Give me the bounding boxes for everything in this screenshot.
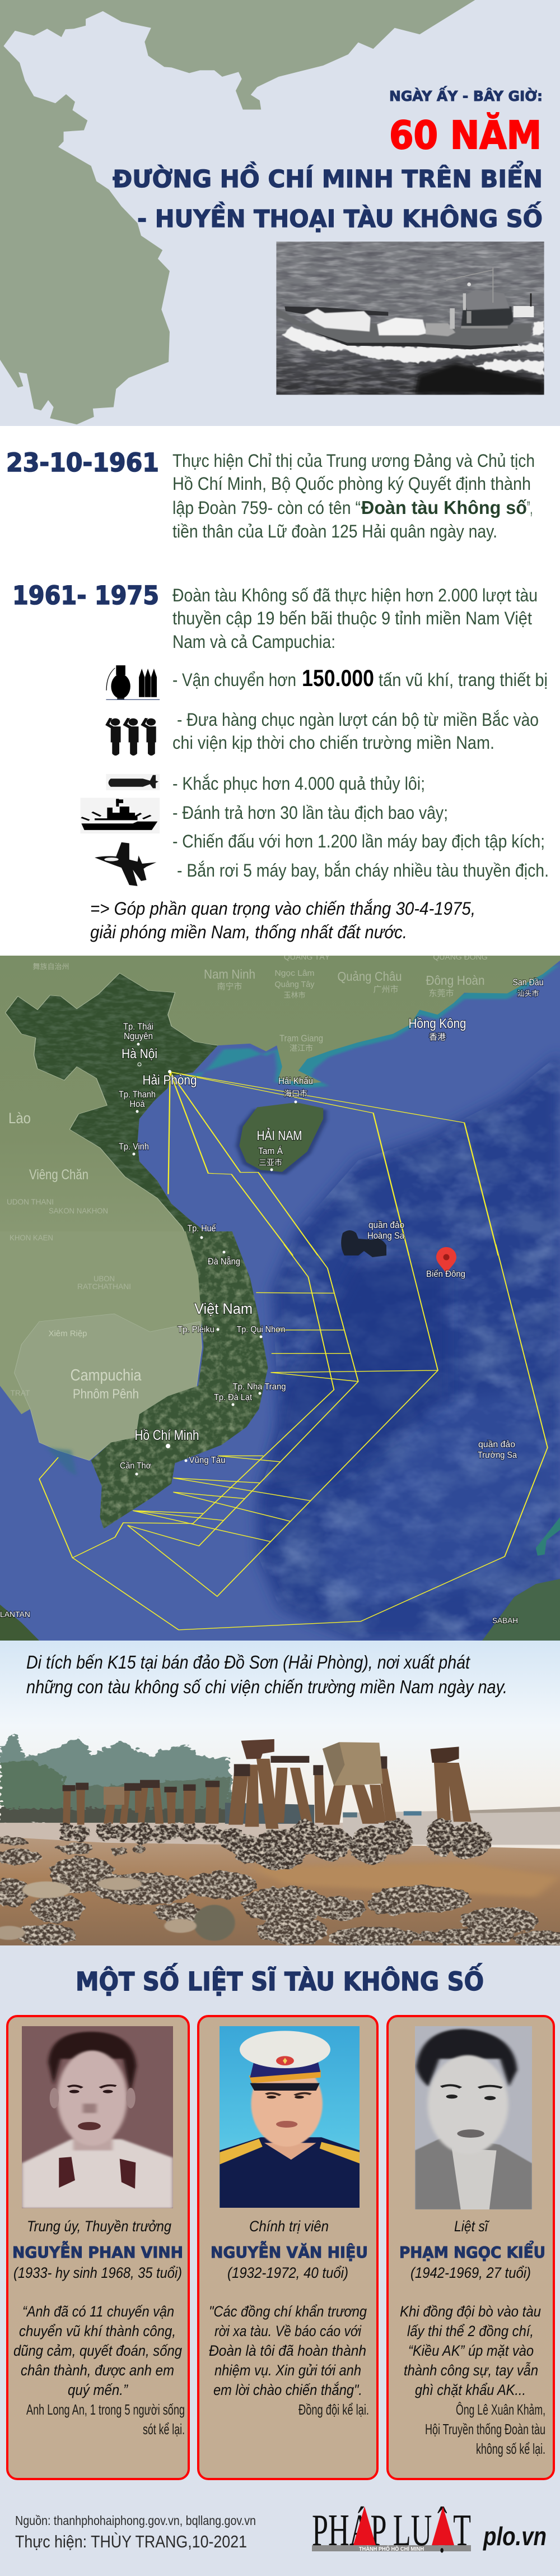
map labels: Tp. Nha Trang [233, 1382, 286, 1392]
map labels: Hồng Kông [409, 1016, 466, 1031]
concrete block [323, 1742, 383, 1786]
text block: founding: Đoàn tàu Không số [361, 497, 527, 518]
card: Nguyễn Phan Vinh [7, 2016, 189, 2479]
icon: saluting soldiers [105, 718, 156, 756]
logo: plo.vn: plo.vn [482, 2522, 547, 2551]
map labels: Nguyên [124, 1031, 153, 1041]
role and name: PHẠM NGỌC KIỂU [399, 2240, 545, 2262]
quote: thành công sự, tay vẫn [404, 2362, 538, 2379]
portrait 1 [21, 2026, 173, 2208]
map labels: Nam Ninh [204, 967, 255, 981]
map labels: Vũng Tàu [189, 1456, 225, 1465]
quote: quý mến.” [68, 2382, 128, 2398]
quote: sót kể lại. [143, 2421, 185, 2438]
source credits: Nguồn: thanhphohaiphong.gov.vn, bqllang.gov.vn [15, 2513, 256, 2528]
conclusion [90, 898, 475, 942]
role and name: Trung úy, Thuyền trưởng [27, 2218, 171, 2235]
logo: Pháp Luật [312, 2506, 471, 2555]
map labels: UBON [94, 1274, 115, 1283]
map labels: quần đảo [368, 1220, 404, 1230]
map labels: Trường Sa [478, 1451, 517, 1460]
photo: boat at sea [276, 242, 544, 395]
map labels: Việt Nam [194, 1300, 253, 1317]
map labels: 香港 [429, 1032, 446, 1042]
role and name: NGUYỄN PHAN VINH [12, 2240, 183, 2262]
conclusion: => Góp phần quan trọng vào chiến thắng 30-4-1975, [90, 898, 475, 919]
map labels: Ngọc Lâm [274, 969, 315, 978]
title line 2: - HUYỀN THOẠI TÀU KHÔNG SỐ [137, 201, 543, 233]
map labels: Tp. Vinh [119, 1141, 149, 1152]
barnacle bases [59, 1818, 491, 1871]
text block: founding: ”, [527, 498, 533, 518]
quote: chân thành, được anh em [21, 2362, 174, 2379]
title line 1: ĐƯỜNG HỒ CHÍ MINH TRÊN BIỂN [113, 161, 543, 193]
quote [209, 2303, 369, 2418]
text block: achievements intro: thuyền cập 19 bến bãi thuộc 9 tỉnh miền Nam Việt [172, 608, 532, 628]
role and name [211, 2218, 368, 2281]
map labels: 东莞市 [428, 989, 454, 998]
map labels: UDON THANI [7, 1197, 54, 1206]
card: Nguyễn Văn Hiệu [198, 2016, 377, 2479]
map labels: QUẢNG ĐÔNG [433, 952, 488, 961]
role and name: (1933- hy sinh 1968, 35 tuổi) [13, 2264, 182, 2281]
quote: lấy thi thể 2 đồng chí, [407, 2323, 534, 2339]
icon: fighter jet [95, 842, 156, 886]
wake [282, 321, 544, 374]
map: sea routes [0, 952, 560, 1641]
map labels: HẢI NAM [256, 1127, 302, 1143]
map labels: Tp. Huế [187, 1223, 216, 1234]
map labels: Tp. Thanh [119, 1089, 156, 1100]
foreground rocks [0, 1837, 560, 1947]
quote: em lời chào chiến thắng". [213, 2381, 362, 2398]
source credits: Thực hiện: THÙY TRANG,10-2021 [15, 2532, 247, 2551]
map labels: Đông Hoàn [426, 973, 485, 988]
portrait 3 [415, 2026, 532, 2209]
quote: ghì chặt khẩu AK... [415, 2382, 526, 2398]
map silhouette of Vietnam and neighbours [0, 0, 475, 424]
kicker: NGÀY ẤY - BÂY GIỜ: [389, 86, 543, 104]
map labels: Tp. Thái [123, 1021, 153, 1032]
map labels: Tp. Pleiku [178, 1325, 214, 1335]
route lines north [168, 1072, 498, 1255]
map labels [0, 952, 543, 1625]
trees [0, 1735, 236, 1824]
map labels: 南宁市 [217, 982, 242, 992]
text block: bullet list: chi viện kịp thời cho chiến trường miền Nam. [172, 733, 494, 753]
deep sea [252, 1054, 560, 1641]
hull [276, 308, 532, 348]
route lines south [39, 1244, 548, 1630]
quote [13, 2303, 185, 2438]
quote: Đồng đội kể lại. [298, 2401, 369, 2418]
map labels: 舞族自治州 [32, 962, 69, 971]
map labels: Hoá [130, 1099, 145, 1109]
card: Phạm Ngọc Kiểu [388, 2016, 554, 2479]
island blob: Hoàng Sa [341, 1230, 386, 1257]
land: Cambodia and south Vietnam [0, 1231, 560, 1641]
text block: bullet list [172, 665, 549, 881]
map labels: 玉林市 [283, 991, 306, 999]
map labels: Xiêm Riệp [48, 1329, 87, 1338]
text block: bullet list: - Đánh trả hơn 30 lần tàu địch bao vây; [172, 803, 448, 823]
map labels: Trạm Giang [279, 1033, 323, 1044]
map labels: 三亚市 [259, 1158, 282, 1167]
role and name: Liệt sĩ [454, 2218, 489, 2235]
section heading: MỘT SỐ LIỆT SĨ TÀU KHÔNG SỐ [76, 1964, 484, 1996]
cargo [304, 290, 514, 336]
tidal flat [0, 1823, 560, 1845]
panel: header [0, 0, 560, 426]
map labels: SAKON NAKHON [49, 1206, 108, 1215]
map labels: Lào [8, 1110, 31, 1127]
map labels: Hà Nội [122, 1046, 157, 1062]
icon: grenade and bullets [106, 665, 160, 699]
map labels: San Đầu [513, 977, 543, 988]
caption: Di tích bến K15 tại bán đảo Đồ Sơn (Hải Phòng), nơi xuất phát [26, 1652, 471, 1672]
map labels: Biển Đông [426, 1269, 465, 1279]
quote: “Anh đã có 11 chuyến vận [22, 2303, 174, 2320]
quote: chuyển vũ khí thành công, [19, 2323, 176, 2339]
map labels: 海口市 [284, 1089, 307, 1098]
logo: Pháp Luật: PHÁP LUẬT [312, 2506, 471, 2555]
map labels: 汕头市 [517, 989, 539, 998]
map labels: TRAT [10, 1388, 30, 1397]
quote: Anh Long An, 1 trong 5 người sống [26, 2401, 185, 2418]
text block: achievements intro: Nam và cả Campuchia: [172, 632, 335, 652]
mud [0, 1837, 560, 1946]
icon: warship [81, 798, 160, 833]
quote: Đoàn là tôi đã hoàn thành [209, 2342, 366, 2359]
map labels: Tp. Đà Lạt [214, 1393, 253, 1402]
map labels: Đà Nẵng [208, 1256, 240, 1267]
role and name [12, 2218, 183, 2281]
text block: founding: tiền thân của Lữ đoàn 125 Hải quân ngày nay. [172, 521, 497, 541]
text block: bullet list: 150.000 [302, 665, 374, 691]
quote: dũng cảm, quyết đoán, sống [13, 2342, 182, 2359]
date 23-10-1961: 23-10-1961 [6, 448, 159, 478]
pillar caps [63, 1739, 459, 1792]
map labels: Phnôm Pênh [73, 1387, 139, 1402]
caption [26, 1652, 507, 1697]
marker: Biển Đông pin [436, 1247, 456, 1274]
panel: timeline [0, 426, 560, 956]
quote: “Kiều AK” úp mặt vào [408, 2342, 534, 2359]
map labels: QUẢNG TÂY [284, 952, 330, 961]
map labels: Hải Khẩu [278, 1076, 313, 1086]
text block: founding: lập Đoàn 759- còn có tên “ [172, 498, 361, 518]
caption: những con tàu không số chi viện chiến trường miền Nam ngày nay. [26, 1676, 507, 1697]
role and name: (1942-1969, 27 tuổi) [410, 2264, 531, 2281]
text block: founding [172, 451, 535, 541]
logo: Pháp Luật: THÀNH PHỐ HỒ CHÍ MINH [359, 2545, 424, 2552]
map labels: Hải Phòng [142, 1073, 197, 1088]
role and name: Chính trị viên [249, 2218, 329, 2235]
quote: "Các đồng chí khẩn trương [209, 2303, 367, 2320]
land: China and Laos, Thailand [0, 956, 560, 1231]
map labels: 广州市 [373, 985, 399, 994]
map labels: Tam Á [258, 1146, 283, 1156]
map labels: LANTAN [0, 1610, 30, 1619]
map city dots [132, 1043, 449, 1475]
role and name: NGUYỄN VĂN HIỆU [211, 2240, 368, 2262]
map labels: Viêng Chăn [29, 1167, 88, 1183]
pillars [63, 1759, 472, 1829]
text block: achievements intro [172, 585, 538, 652]
source credits [15, 2513, 256, 2551]
title: 60 năm: 60 NĂM [389, 112, 542, 158]
map labels: 湛江市 [290, 1044, 313, 1053]
map labels: Hồ Chí Minh [134, 1428, 199, 1443]
quote [400, 2303, 545, 2457]
text block: founding: Hồ Chí Minh, Bộ Quốc phòng ký Quyết định thành [172, 474, 531, 494]
panel: martyrs section [0, 1945, 560, 2576]
quote: rời xa tàu. Về báo cáo với [214, 2323, 362, 2339]
quote: nhiệm vụ. Xin gửi tới anh [214, 2362, 361, 2379]
map labels: Cần Thơ [120, 1461, 151, 1471]
text block: bullet list: tấn vũ khí, trang thiết bị [379, 670, 548, 690]
map labels: Quảng Tây [274, 980, 315, 989]
map labels: SABAH [492, 1616, 518, 1625]
role and name: (1932-1972, 40 tuổi) [227, 2264, 348, 2281]
date 1961-1975: 1961- 1975 [12, 581, 159, 610]
map labels: Quảng Châu [337, 969, 402, 984]
map labels: KHON KAEN [10, 1233, 53, 1242]
role and name [399, 2218, 545, 2281]
land: Vietnam north and Hainan [6, 973, 327, 1262]
text block: bullet list: - Vận chuyển hơn [172, 670, 296, 690]
map labels: quần đảo [478, 1440, 515, 1449]
portrait 2 [220, 2026, 360, 2208]
panel: K15 relic photo [0, 1641, 560, 1947]
map labels: Campuchia [71, 1366, 142, 1384]
quote: Khi đồng đội bò vào tàu [400, 2303, 541, 2320]
map labels: Hoàng Sa [367, 1230, 404, 1241]
text block: bullet list: - Khắc phục hơn 4.000 quả thủy lôi; [172, 773, 425, 794]
conclusion: giải phóng miền Nam, thống nhất đất nước. [90, 922, 407, 942]
map labels: RATCHATHANI [77, 1282, 131, 1291]
map labels: Tp. Qui Nhơn [236, 1325, 286, 1335]
icon: naval mine torpedo [106, 774, 160, 790]
